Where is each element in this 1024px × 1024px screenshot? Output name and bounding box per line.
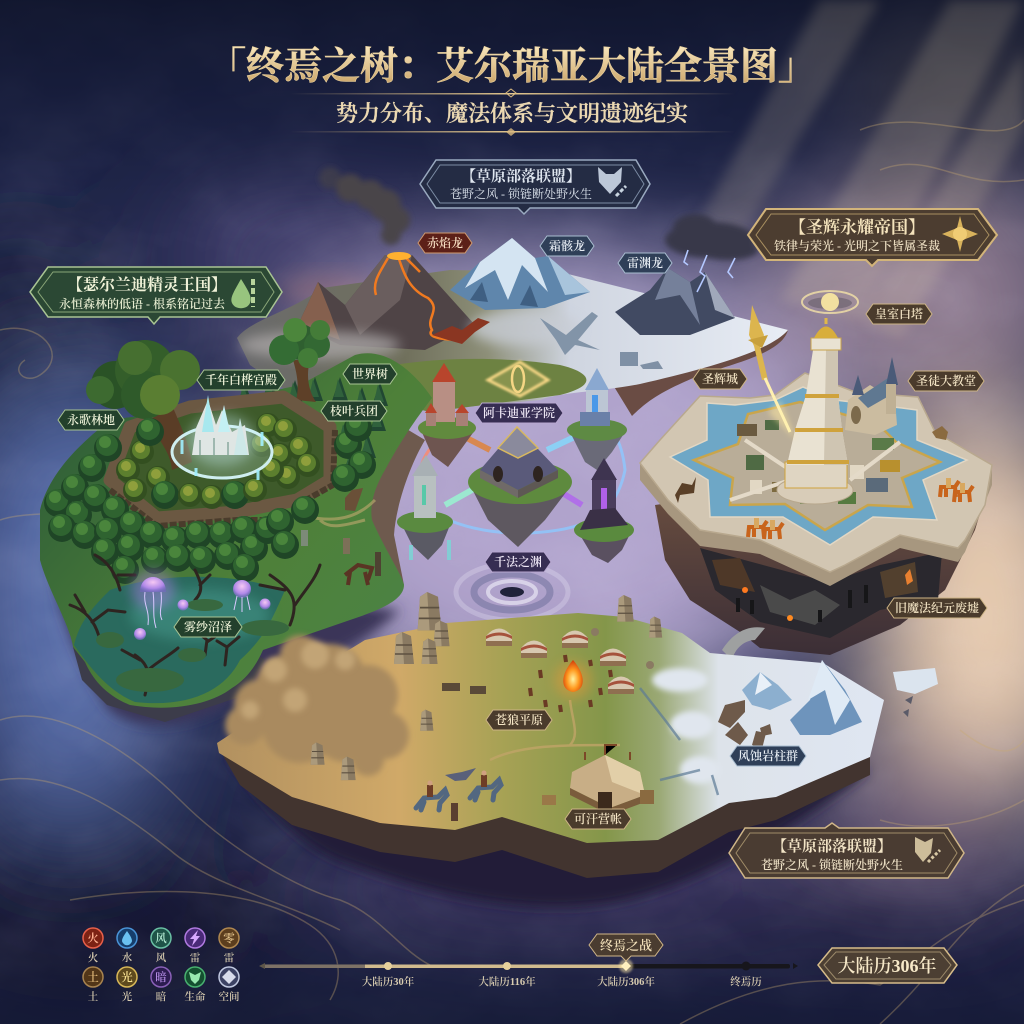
- legend: magic elements: [83, 928, 240, 1003]
- subtitle: 势力分布、魔法体系与文明遗迹纪实: [336, 101, 688, 126]
- label: abyss: 千法之渊: [494, 554, 542, 569]
- arcane tower island: [574, 458, 634, 563]
- element: water: 水: [122, 951, 133, 964]
- khan tent: [542, 745, 654, 815]
- snow edge patches: [652, 668, 720, 784]
- label: radiant city: 圣辉城: [702, 371, 738, 386]
- timeline future bar: [626, 963, 798, 969]
- timeline marker: final battle: 终焉之战: [600, 938, 652, 953]
- element: water: [117, 928, 137, 964]
- element: zero: 雷: [224, 951, 235, 964]
- banner: Steppe Tribes north: [420, 160, 650, 214]
- elf palace: [182, 395, 262, 480]
- label: fire dragon: [418, 233, 472, 253]
- element: earth: 土: [88, 990, 99, 1003]
- forest island shadow: [50, 560, 400, 724]
- label: abyss: [485, 552, 551, 572]
- label: birch palace: 千年白桦宫殿: [205, 372, 277, 387]
- element: earth: 土: [87, 970, 99, 984]
- storm peaks: [615, 268, 735, 335]
- banner motto: 铁律与荣光 - 光明之下皆属圣裁: [774, 238, 940, 253]
- timeline node: year 116: [478, 962, 536, 988]
- royal white tower: [777, 318, 853, 504]
- fortress rock base: [655, 480, 990, 655]
- label: arcadia academy: 阿卡迪亚学院: [483, 405, 555, 420]
- label: cathedral: [908, 371, 984, 391]
- timeline past bar: [259, 963, 626, 969]
- inner citadel wall: [694, 402, 940, 530]
- swamp teal ground: [74, 577, 285, 703]
- snow rocks: [620, 352, 663, 369]
- southern surface: [217, 613, 884, 843]
- mist between mountains: [240, 331, 400, 359]
- subtitle divider: [290, 128, 735, 136]
- label: song woodland: [58, 410, 124, 430]
- icon: wolf: [598, 167, 626, 196]
- label: khan tent: [565, 809, 631, 829]
- element: wind: [151, 928, 171, 964]
- banner: Steppe Tribes south: [729, 823, 964, 878]
- banner: Elf Kingdom: [30, 267, 282, 324]
- current year badge: [818, 948, 957, 983]
- elf palace ring: [172, 426, 272, 478]
- eroded rock cluster: [718, 700, 772, 749]
- banner: Radiant Empire: [748, 209, 997, 266]
- water tower island: [567, 368, 627, 470]
- snow cracks: [640, 688, 718, 795]
- title divider top: [290, 89, 735, 97]
- label: royal tower: [866, 304, 932, 324]
- lightning: [684, 250, 735, 292]
- island: Radiant Empire star fortress: [640, 291, 992, 660]
- volcano: [298, 252, 475, 350]
- city buildings: [730, 420, 900, 504]
- banner heading: 【草原部落联盟】: [772, 837, 892, 855]
- timeline node: year 30: 大陆历30年: [362, 975, 415, 988]
- element: earth: [83, 967, 103, 1003]
- element: thunder: 雷: [190, 951, 201, 964]
- palisade compound: [110, 397, 330, 518]
- label: leaf legion: 枝叶兵团: [330, 403, 378, 418]
- timeline node: year 306: [597, 959, 655, 988]
- element: thunder: [185, 928, 205, 964]
- label: mist swamp: [174, 617, 242, 637]
- snow peaks: [742, 660, 862, 735]
- golden orb: [802, 291, 858, 313]
- label: royal tower: 皇室白塔: [875, 306, 923, 321]
- background conifers: [237, 377, 388, 471]
- trail: [490, 700, 620, 760]
- element: fire: [83, 928, 103, 964]
- label: cathedral: 圣徒大教堂: [916, 373, 976, 388]
- dust storm: [225, 635, 409, 776]
- element: dark: 暗: [156, 990, 167, 1003]
- stone bridge: [722, 627, 765, 660]
- banner motto: 永恒森林的低语 - 根系铭记过去: [59, 296, 226, 311]
- label: old ruins: [887, 598, 987, 618]
- element: space: [218, 967, 240, 1003]
- bridge: water: [547, 432, 585, 450]
- forest land: [40, 353, 432, 708]
- bridge: wind: [445, 476, 497, 505]
- wall side: [640, 463, 992, 586]
- right cliff: [368, 425, 425, 585]
- golden spear: [748, 305, 796, 440]
- element: dark: 暗: [155, 970, 167, 984]
- wall shading: [110, 430, 335, 526]
- floating ice chunk: [893, 668, 938, 694]
- timeline marker: final battle: [589, 934, 663, 961]
- banner heading: 【瑟尔兰迪精灵王国】: [67, 275, 227, 294]
- icon: wolf emblem: [915, 837, 940, 862]
- swamp shrubs: [96, 599, 289, 692]
- location labels: [58, 233, 987, 829]
- element: zero: 零: [223, 931, 235, 945]
- label: wolf plains: [486, 710, 552, 730]
- bridge: fire: [455, 432, 490, 450]
- northern island surface: [237, 270, 788, 410]
- timeline: [259, 934, 957, 988]
- campfire: [555, 660, 591, 698]
- southern island shadow: [225, 755, 870, 908]
- timeline node: end era: [730, 962, 762, 988]
- label: leaf legion: [321, 401, 387, 421]
- underside rock: [610, 330, 788, 416]
- banner heading: 【圣辉永耀帝国】: [789, 217, 925, 237]
- icon: sun: [942, 216, 978, 252]
- element: light: 光: [122, 990, 133, 1003]
- element: fire: 火: [88, 951, 99, 964]
- label: khan tent: 可汗营帐: [574, 811, 622, 826]
- yurts: [486, 628, 634, 694]
- label: wolf plains: 苍狼平原: [495, 712, 544, 727]
- floating academy islands: [397, 362, 634, 620]
- island: northern dragon lands: [237, 167, 788, 416]
- outer forest trees: [44, 414, 376, 584]
- glowing eye rune: [488, 362, 548, 396]
- old magic era ruins: [700, 548, 942, 638]
- label: thunder dragon: [618, 253, 672, 273]
- bridge: arcane: [538, 478, 582, 505]
- element: wind: 风: [156, 952, 167, 964]
- label: arcadia academy: [475, 403, 563, 423]
- element: wind: 风: [155, 932, 167, 945]
- path: [295, 500, 375, 526]
- element: space: 空间: [218, 990, 240, 1003]
- title: 「终焉之树：艾尔瑞亚大陆全景图」: [208, 46, 816, 88]
- timeline node: year 306: 大陆历306年: [597, 975, 655, 988]
- element: fire: 火: [87, 931, 99, 945]
- label: frost dragon: 霜骸龙: [549, 238, 585, 253]
- timeline node: year 30: [362, 962, 415, 988]
- ice peaks: [450, 238, 590, 310]
- element: light: 光: [121, 970, 133, 984]
- label: birch palace: [197, 370, 285, 390]
- label: radiant city: [693, 369, 747, 389]
- element: light: [117, 967, 137, 1003]
- swamp cliff side: [73, 640, 265, 722]
- vortex abyss: [456, 564, 568, 620]
- label: world tree: [343, 364, 397, 384]
- top darkening band: [0, 0, 1024, 230]
- ice dragon: [540, 312, 600, 355]
- wind tower island: [397, 455, 453, 560]
- element: life: 生命: [184, 990, 206, 1003]
- island: southern steppe: [217, 592, 938, 908]
- label: mist swamp: 雾纱沼泽: [184, 619, 232, 634]
- label: fire dragon: 赤焰龙: [427, 235, 463, 250]
- arcane ring: [418, 415, 625, 533]
- label: old ruins: 旧魔法纪元废墟: [895, 600, 979, 615]
- tribesmen: [530, 655, 611, 712]
- storm cloud: [665, 214, 758, 260]
- empire troops: [675, 426, 973, 539]
- wolf riders: [416, 683, 501, 821]
- banner motto: 苍野之风 - 锁链断处野火生: [450, 186, 592, 201]
- label: song woodland: 永歌林地: [67, 412, 115, 427]
- label: frost dragon: [540, 236, 594, 256]
- element: zero: [219, 928, 239, 964]
- label: rock pillars: 风蚀岩柱群: [738, 748, 798, 763]
- red dragon: [432, 318, 490, 344]
- label: world tree: 世界树: [352, 366, 388, 381]
- smoke plume: [319, 167, 410, 245]
- timeline node: year 116: 大陆历116年: [478, 975, 536, 988]
- label: thunder dragon: 雷渊龙: [627, 255, 663, 270]
- jellyfish: [131, 570, 270, 640]
- world tree: [269, 318, 330, 402]
- timeline node: end era: 终焉历: [730, 975, 762, 988]
- label: rock pillars: [730, 746, 806, 766]
- elf soldiers: [301, 488, 381, 585]
- rock pillars: [311, 592, 662, 780]
- banner motto: 苍野之风 - 锁链断处野火生: [761, 857, 903, 872]
- stone star platform: [640, 373, 992, 572]
- banner heading: 【草原部落联盟】: [461, 167, 581, 185]
- moat: [670, 387, 967, 545]
- ice shards: [903, 696, 913, 717]
- element: dark: [151, 967, 171, 1003]
- great tree: [86, 340, 200, 470]
- cathedral: [845, 357, 898, 435]
- inner bushes: [116, 413, 320, 509]
- current year badge: 大陆历306年: [838, 955, 936, 976]
- island: elf forest kingdom: [40, 318, 432, 724]
- fire tower island: [418, 363, 476, 467]
- element: life: [184, 967, 206, 1003]
- central pyramid island: [468, 427, 572, 547]
- green meadow: [320, 359, 586, 412]
- icon: water drop and chain: [231, 279, 253, 308]
- dead swamp trees: [70, 555, 320, 695]
- southern cliff: [217, 745, 870, 878]
